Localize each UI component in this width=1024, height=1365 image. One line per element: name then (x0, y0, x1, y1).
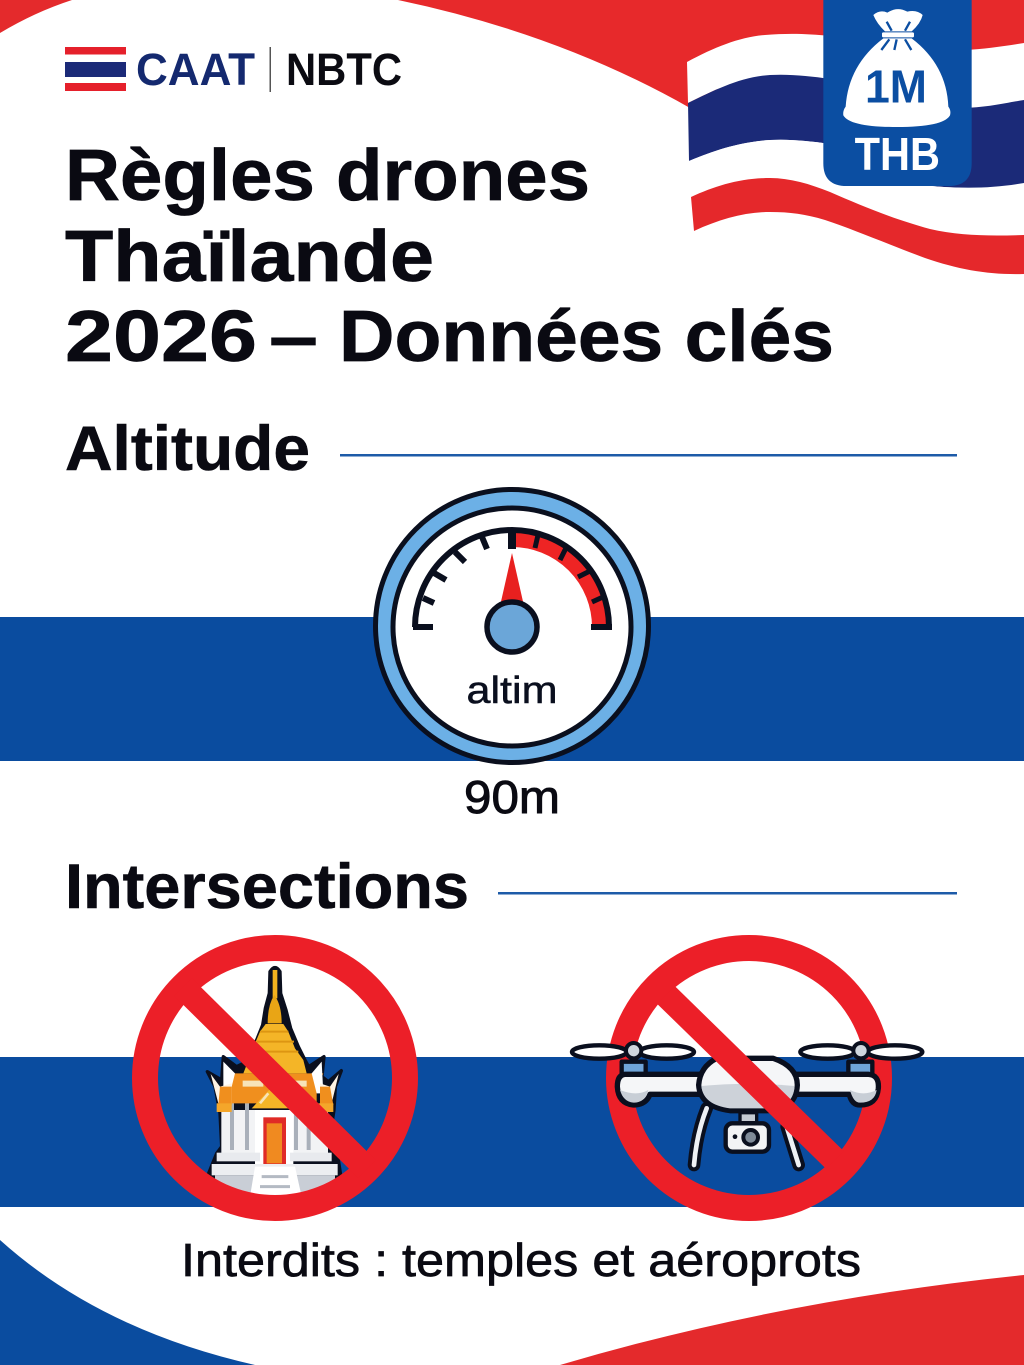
fine badge: 1M THB: 1M (865, 61, 927, 113)
logo: CAAT | NBTC (65, 44, 402, 95)
fine badge: 1M THB: THB (855, 128, 940, 180)
temple (207, 967, 341, 1197)
title: Règles drones (65, 136, 590, 216)
logo: CAAT | NBTC: CAAT (136, 44, 255, 95)
icon: drone prohibited (572, 948, 922, 1208)
title: 2026 (65, 297, 257, 377)
icon: money bag (843, 9, 950, 127)
top red swoosh into flag (398, 0, 1024, 108)
icon: temple prohibited (145, 948, 405, 1208)
Thai flag waving (687, 34, 1024, 274)
title: Données clés (339, 297, 834, 377)
heading: Intersections: Intersections (65, 852, 469, 922)
title (65, 136, 834, 377)
top-left red corner wave (0, 0, 72, 33)
icon: altimeter gauge (376, 490, 648, 762)
bottom-right red wave (560, 1275, 1024, 1365)
icon: small Thai flag (65, 47, 126, 91)
fine badge: 1M THB (823, 0, 972, 186)
drone (572, 1043, 922, 1165)
caption: Interdits : temples et aéroprots (181, 1234, 861, 1286)
title: Thaïlande (65, 217, 434, 297)
ring (619, 948, 879, 1208)
heading: Altitude: Altitude (65, 414, 310, 484)
icon: altimeter gauge: altim (466, 670, 558, 712)
slash (666, 995, 835, 1160)
bottom-left blue wave (0, 1240, 255, 1365)
blue band: altitude (0, 617, 1024, 761)
logo: CAAT | NBTC: NBTC (286, 44, 402, 95)
blue band: intersections (0, 1057, 1024, 1207)
title: – (269, 297, 318, 377)
altitude value: 90m: 90m (464, 771, 560, 823)
prohibition sign (145, 948, 405, 1208)
